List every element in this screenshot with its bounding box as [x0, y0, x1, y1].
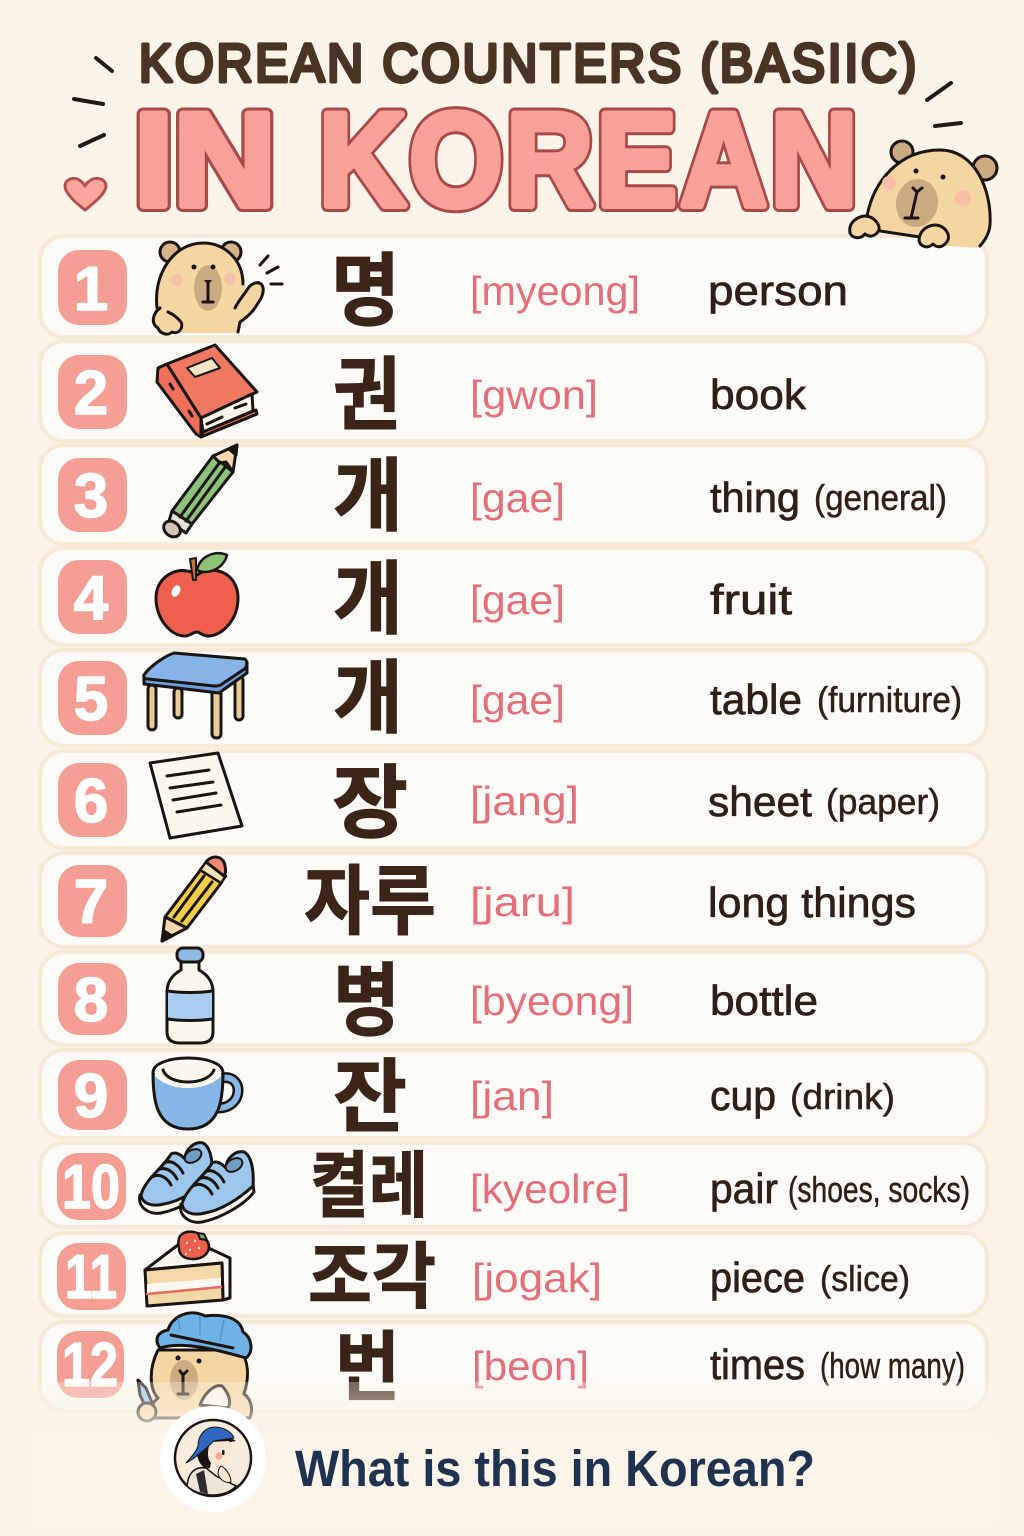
pronunciation: [jaru] — [470, 879, 575, 925]
heading: In Korean: KOREAN — [319, 86, 861, 234]
icon: avatar of student in blue cap — [160, 1406, 266, 1512]
korean: gae: 개 — [333, 555, 403, 644]
pronunciation: [gae] — [470, 475, 565, 521]
icon: green pencil — [161, 445, 237, 540]
title: Korean Counters (Basic): KOREAN COUNTERS (BASIIC) — [139, 34, 919, 94]
korean: myeong: 명 — [331, 247, 400, 336]
badge 2 — [58, 355, 127, 429]
icon: cake slice — [145, 1232, 230, 1306]
badge 7 — [58, 865, 127, 937]
pronunciation: [jogak] — [472, 1255, 602, 1301]
icon: yellow pencil — [162, 857, 226, 941]
badge 8: 8 — [74, 966, 108, 1035]
meaning: (shoes, socks) — [788, 1169, 970, 1210]
row 8: bottle — [40, 948, 987, 1046]
peeking bear over table top — [850, 141, 997, 248]
icon: pair of shoes — [140, 1143, 254, 1222]
meaning: (general) — [814, 477, 947, 518]
meaning — [710, 1072, 895, 1119]
meaning: (drink) — [790, 1076, 895, 1117]
pronunciation: [gae] — [470, 677, 565, 723]
meaning: cup — [710, 1072, 776, 1119]
pronunciation: [gwon] — [470, 372, 598, 418]
badge 4: 4 — [74, 564, 109, 633]
badge 5 — [58, 661, 127, 735]
icon: apple — [156, 553, 238, 636]
badge 4 — [58, 560, 127, 634]
footer text: What is this in Korean? — [295, 1440, 815, 1497]
row 12: times — [40, 1313, 987, 1421]
row 7: long things — [40, 853, 987, 947]
badge 8 — [58, 963, 127, 1035]
decorative sparkle lines — [74, 58, 961, 146]
meaning: (paper) — [826, 781, 940, 822]
meaning: long things — [708, 879, 916, 926]
meaning: (slice) — [820, 1258, 910, 1299]
heading: In Korean: KOREAN — [319, 86, 861, 234]
meaning: times — [710, 1341, 805, 1388]
pronunciation: [beon] — [472, 1343, 589, 1389]
badge 6 — [58, 763, 127, 837]
row 10: shoes — [40, 1143, 987, 1227]
row 6: paper — [40, 751, 987, 848]
badge 5: 5 — [74, 665, 108, 734]
meaning: (furniture) — [817, 679, 962, 720]
pronunciation: [myeong] — [470, 268, 640, 314]
icon: book — [157, 345, 257, 437]
badge 2: 2 — [74, 359, 108, 428]
badge 3: 3 — [74, 462, 108, 531]
korean: jogak: 조각 — [308, 1238, 436, 1318]
korean: kyeolre: 켤레 — [310, 1147, 428, 1227]
meaning — [710, 676, 962, 723]
meaning — [710, 1165, 970, 1212]
pronunciation: [gae] — [470, 577, 565, 623]
korean: gae: 개 — [333, 452, 403, 541]
korean: byeong: 병 — [333, 957, 400, 1046]
korean: gae: 개 — [333, 654, 403, 743]
row 4: fruit — [40, 548, 987, 645]
pronunciation: [byeong] — [470, 978, 634, 1024]
badge 3 — [58, 458, 127, 532]
icon: waving bear — [153, 242, 282, 334]
heading: In Korean — [134, 86, 861, 234]
icon: bear with beanie and notepad — [138, 1313, 252, 1421]
badge 9: 9 — [74, 1062, 108, 1131]
pronunciation: [kyeolre] — [470, 1166, 630, 1212]
icon: heart — [65, 178, 106, 210]
meaning: pair — [710, 1165, 778, 1212]
korean: beon: 번 — [335, 1326, 400, 1411]
row 2: book — [40, 341, 987, 441]
meaning: fruit — [710, 576, 792, 623]
heading: In Korean: IN — [134, 86, 276, 234]
footer fade band — [0, 1382, 1024, 1442]
meaning: table — [710, 676, 802, 723]
icon: cup — [153, 1058, 238, 1129]
meaning: bottle — [710, 977, 818, 1024]
meaning: (how many) — [820, 1345, 965, 1386]
row 1: person — [40, 236, 987, 337]
meaning: sheet — [708, 778, 812, 825]
korean: jang: 장 — [332, 759, 408, 848]
korean: jan: 잔 — [333, 1053, 407, 1142]
badge 7: 7 — [74, 868, 108, 937]
badge 9 — [58, 1060, 127, 1131]
meaning: piece — [710, 1254, 805, 1301]
row 9: cup — [40, 1050, 987, 1142]
header — [65, 34, 961, 234]
badge 12: 12 — [62, 1331, 118, 1400]
korean: jaru: 자루 — [304, 860, 436, 945]
row 11: cake — [40, 1232, 987, 1318]
badge 1: 1 — [74, 255, 108, 324]
meaning: person — [708, 267, 848, 314]
footer — [25, 1406, 1000, 1530]
pronunciation: [jan] — [470, 1073, 554, 1119]
icon: sheet of paper — [150, 753, 242, 838]
row 5: table — [40, 650, 987, 746]
badge 6: 6 — [74, 767, 108, 836]
badge 1 — [58, 250, 127, 325]
badge 11: 11 — [65, 1243, 117, 1312]
icon: blue table — [144, 653, 247, 738]
pronunciation: [jang] — [470, 778, 579, 824]
row 3: thing — [40, 445, 987, 544]
meaning: thing — [710, 474, 800, 521]
heading: In Korean: IN — [134, 86, 276, 234]
meaning — [710, 1254, 910, 1301]
korean: gwon: 권 — [333, 351, 401, 440]
icon: bottle — [167, 948, 213, 1043]
meaning — [710, 474, 947, 521]
meaning — [710, 1341, 965, 1388]
badge 10: 10 — [62, 1153, 120, 1222]
meaning: book — [710, 371, 807, 418]
meaning — [708, 778, 940, 825]
